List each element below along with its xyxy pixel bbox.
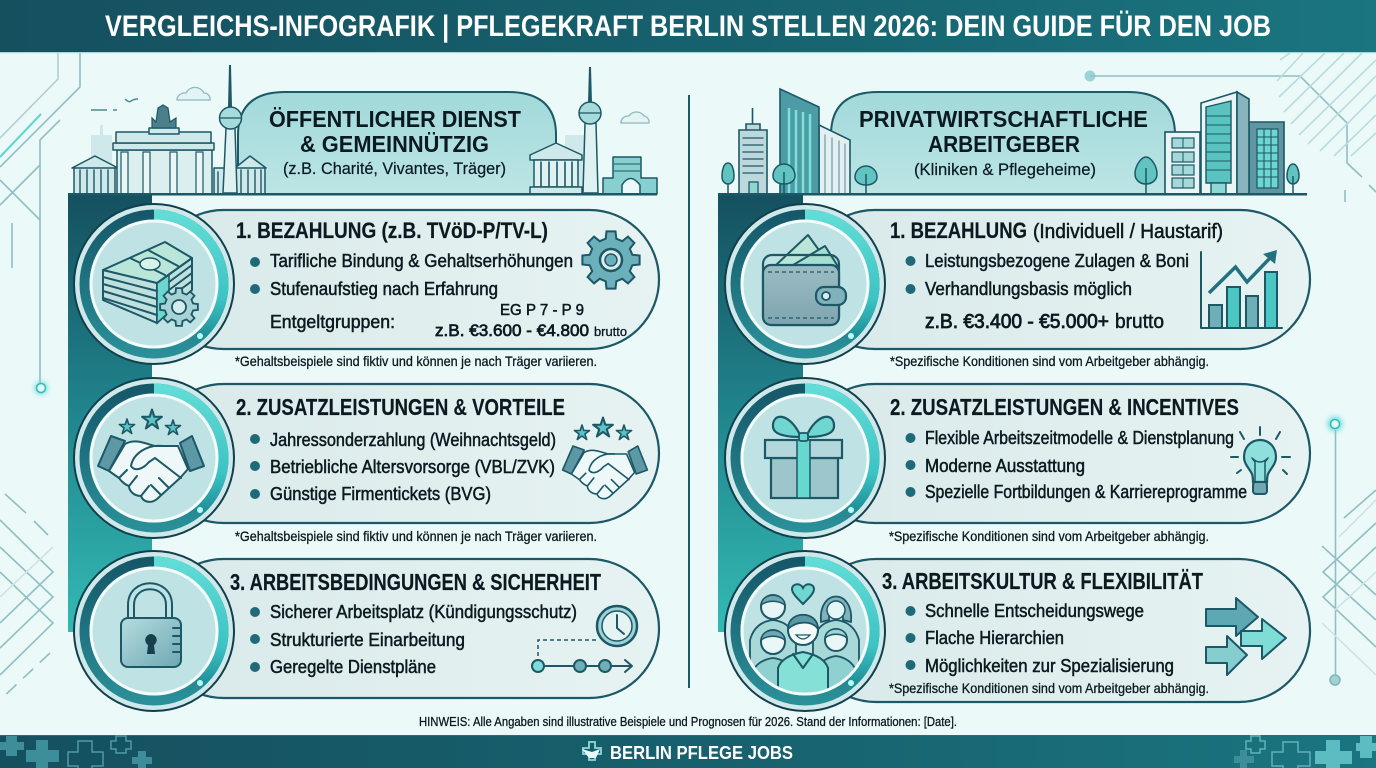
trees (722, 157, 1299, 194)
icon: padlock (121, 586, 181, 667)
heading tab shape (238, 92, 556, 194)
section heading: 2. ZUSATZLEISTUNGEN & VORTEILE (236, 394, 565, 420)
icon: handshake small (563, 418, 647, 499)
badge ring (74, 378, 234, 538)
pay groups (270, 302, 627, 340)
bullet list: Sicherer Arbeitsplatz (Kündigungsschutz) (270, 602, 577, 622)
section heading: 1. BEZAHLUNG (z.B. TVöD-P/TV-L) (236, 218, 548, 243)
bullet list: Möglichkeiten zur Spezialisierung (925, 656, 1174, 676)
bullet list: Flexible Arbeitszeitmodelle & Dienstplanung (925, 428, 1234, 448)
footnote 1: *Spezifische Konditionen sind vom Arbeitgeber abhängig. (890, 353, 1209, 369)
footnote 3: *Spezifische Konditionen sind vom Arbeitgeber abhängig. (889, 680, 1209, 696)
heading text: ÖFFENTLICHER DIENST (269, 106, 522, 132)
bullet list (250, 602, 577, 677)
bullet list: Flache Hierarchien (925, 628, 1064, 648)
side bar right (718, 193, 803, 632)
pay groups: brutto (594, 324, 627, 339)
salary range: brutto (1115, 311, 1164, 333)
bullet list: Geregelte Dienstpläne (270, 657, 436, 677)
bullet list: Jahressonderzahlung (Weihnachtsgeld) (270, 430, 556, 450)
icon: arrows (1206, 598, 1286, 675)
side bar left (68, 193, 152, 632)
section heading: 3. ARBEITSBEDINGUNGEN & SICHERHEIT (230, 569, 601, 595)
pay groups: Entgeltgruppen: (270, 312, 395, 332)
footnote 2: *Spezifische Konditionen sind vom Arbeitgeber abhängig. (889, 528, 1209, 544)
bullet list: Spezielle Fortbildungen & Karriereprogramme (925, 482, 1247, 502)
pay groups: EG P 7 - P 9 (500, 302, 584, 319)
icon: wallet (763, 235, 846, 325)
icon: clock and timeline (532, 606, 637, 672)
icon: growth chart (1201, 250, 1282, 328)
footnote 1: *Gehaltsbeispiele sind fiktiv und können je nach Träger variieren. (235, 353, 597, 369)
icon: light bulb (1231, 427, 1290, 494)
heading text: (Kliniken & Pflegeheime) (914, 160, 1096, 179)
skyline: berlin landmarks (68, 65, 657, 196)
towers right (1165, 92, 1284, 194)
icon: money stack with gear (103, 242, 198, 326)
badge ring (725, 551, 885, 711)
bullet list (250, 430, 556, 504)
heading text: ARBEITGEBER (928, 131, 1080, 157)
section heading: 1. BEZAHLUNG (890, 218, 1027, 243)
decorative circuit lines right (1084, 53, 1376, 685)
card 2: zusatzleistungen (725, 378, 1310, 538)
bullet list (906, 251, 1189, 299)
badge ring (74, 551, 234, 711)
panel: öffentlicher dienst (68, 65, 659, 711)
badge ring (74, 204, 234, 364)
card 1: bezahlung (74, 204, 659, 364)
panel: privatwirtschaftliche arbeitgeber (718, 89, 1310, 711)
logo and brand: BERLIN PFLEGE JOBS (610, 742, 793, 763)
card 1: bezahlung (725, 204, 1310, 364)
bullet list: Betriebliche Altersvorsorge (VBL/ZVK) (270, 457, 555, 477)
bullet list: Günstige Firmentickets (BVG) (270, 484, 491, 504)
section heading: 2. ZUSATZLEISTUNGEN & INCENTIVES (890, 394, 1239, 420)
icon: team with heart (750, 584, 859, 694)
icon: gear (582, 231, 640, 289)
card 2: zusatzleistungen (74, 378, 659, 538)
bullet list: Schnelle Entscheidungswege (925, 601, 1144, 621)
decorative crosses (0, 736, 1376, 768)
bullet list: Moderne Ausstattung (925, 456, 1085, 476)
section heading: 3. ARBEITSKULTUR & FLEXIBILITÄT (882, 568, 1203, 594)
section heading (890, 218, 1223, 243)
bullet list: Verhandlungsbasis möglich (925, 279, 1132, 299)
card 3: arbeitskultur (725, 551, 1310, 711)
icon: gift box (765, 417, 842, 498)
badge ring (725, 204, 885, 364)
heading tab shape (831, 92, 1175, 194)
center divider (688, 95, 690, 688)
heading text: PRIVATWIRTSCHAFTLICHE (859, 106, 1148, 132)
card 3: arbeitsbedingungen (74, 551, 659, 711)
heading text: (z.B. Charité, Vivantes, Träger) (283, 159, 506, 178)
footnote 2: *Gehaltsbeispiele sind fiktiv und können je nach Träger variieren. (235, 528, 597, 544)
skyline: office buildings (718, 89, 1307, 196)
bullet list: Leistungsbezogene Zulagen & Boni (925, 251, 1189, 271)
section heading: (Individuell / Haustarif) (1033, 221, 1223, 243)
title banner (0, 0, 1376, 53)
bullet list: Tarifliche Bindung & Gehaltserhöhungen (270, 251, 573, 271)
icon: handshake with stars (98, 410, 204, 502)
badge ring (725, 378, 885, 538)
bullet list: Strukturierte Einarbeitung (270, 630, 465, 650)
bullet list (906, 601, 1174, 676)
disclaimer: HINWEIS: Alle Angaben sind illustrative Beispiele und Prognosen für 2026. Stand der Informationen: [Date]. (419, 714, 957, 729)
bullet list: Stufenaufstieg nach Erfahrung (270, 279, 498, 299)
bullet list (906, 428, 1247, 502)
pay groups: z.B. €3.600 - €4.800 (435, 321, 589, 340)
footer bar (0, 735, 1376, 768)
bullet list (250, 251, 573, 299)
towers left (739, 89, 850, 194)
decorative circuit lines left (0, 52, 80, 700)
salary range: z.B. €3.400 - €5.000+ (925, 311, 1109, 333)
heading text: & GEMEINNÜTZIG (300, 131, 489, 157)
heading text (859, 106, 1148, 179)
heading text (269, 106, 522, 178)
